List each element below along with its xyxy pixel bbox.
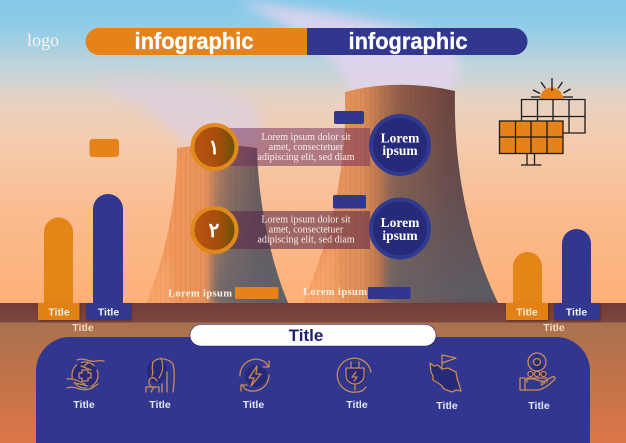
logo: logo [27,30,59,50]
right bar chart [506,229,600,334]
section title pill [190,324,436,346]
step 1 callout: adipiscing elit, sed diam [257,152,355,163]
icon: renewable energy [240,359,269,391]
left tower label [168,287,278,300]
icon: electric plug [337,358,371,392]
right bar chart: Title [516,306,538,318]
step 2 callout: ipsum [382,228,418,243]
solar panels and sun icon [500,78,585,165]
icon labels: Title [243,399,264,411]
right tower label: Lorem ipsum [303,287,367,298]
step 1 callout: ١ [209,137,219,159]
icon labels: Title [73,399,95,411]
icon labels: Title [436,400,458,412]
title banner [86,28,528,55]
right cooling tower [295,85,503,310]
left bar chart: Title [48,306,70,318]
step 2 callout [192,195,429,258]
left bar chart: Title [72,322,94,334]
icon labels [73,399,550,412]
title banner: infographic [348,28,468,54]
step 1 callout: Lorem [381,130,420,146]
step 2 callout: Lorem [381,215,420,230]
icon: hand with people [520,353,555,390]
small orange tag [90,139,119,157]
bottom panel [36,337,590,443]
step 2 callout: amet, consectetuer [269,224,344,236]
ground band [0,303,626,322]
right bar chart: Title [543,322,565,334]
right bar chart: Title [566,306,587,318]
step 2 callout: adipiscing elit, sed diam [257,234,355,246]
icon labels: Title [346,399,368,411]
icon: care hands [67,359,104,390]
icon labels: Title [149,399,171,411]
right smoke plume [235,0,460,92]
icon: map with flag [430,355,461,392]
icon: family [146,358,174,392]
title banner: infographic [134,28,254,54]
section title pill: Title [289,326,323,345]
step 1 callout [192,111,429,174]
left smoke plume [92,78,260,150]
background sky [0,0,626,303]
step 2 callout: Lorem ipsum dolor sit [261,214,351,226]
left bar chart: Title [98,306,119,318]
step 1 callout: Lorem ipsum dolor sit [261,132,351,143]
icon labels: Title [528,400,550,412]
step 2 callout: ٢ [209,220,220,242]
right tower label [303,287,410,299]
step 1 callout: amet, consectetuer [269,142,344,153]
left cooling tower [146,146,288,303]
ground soil [0,322,626,443]
left bar chart [38,194,131,334]
step 1 callout: ipsum [382,143,418,158]
left tower label: Lorem ipsum [168,288,232,300]
